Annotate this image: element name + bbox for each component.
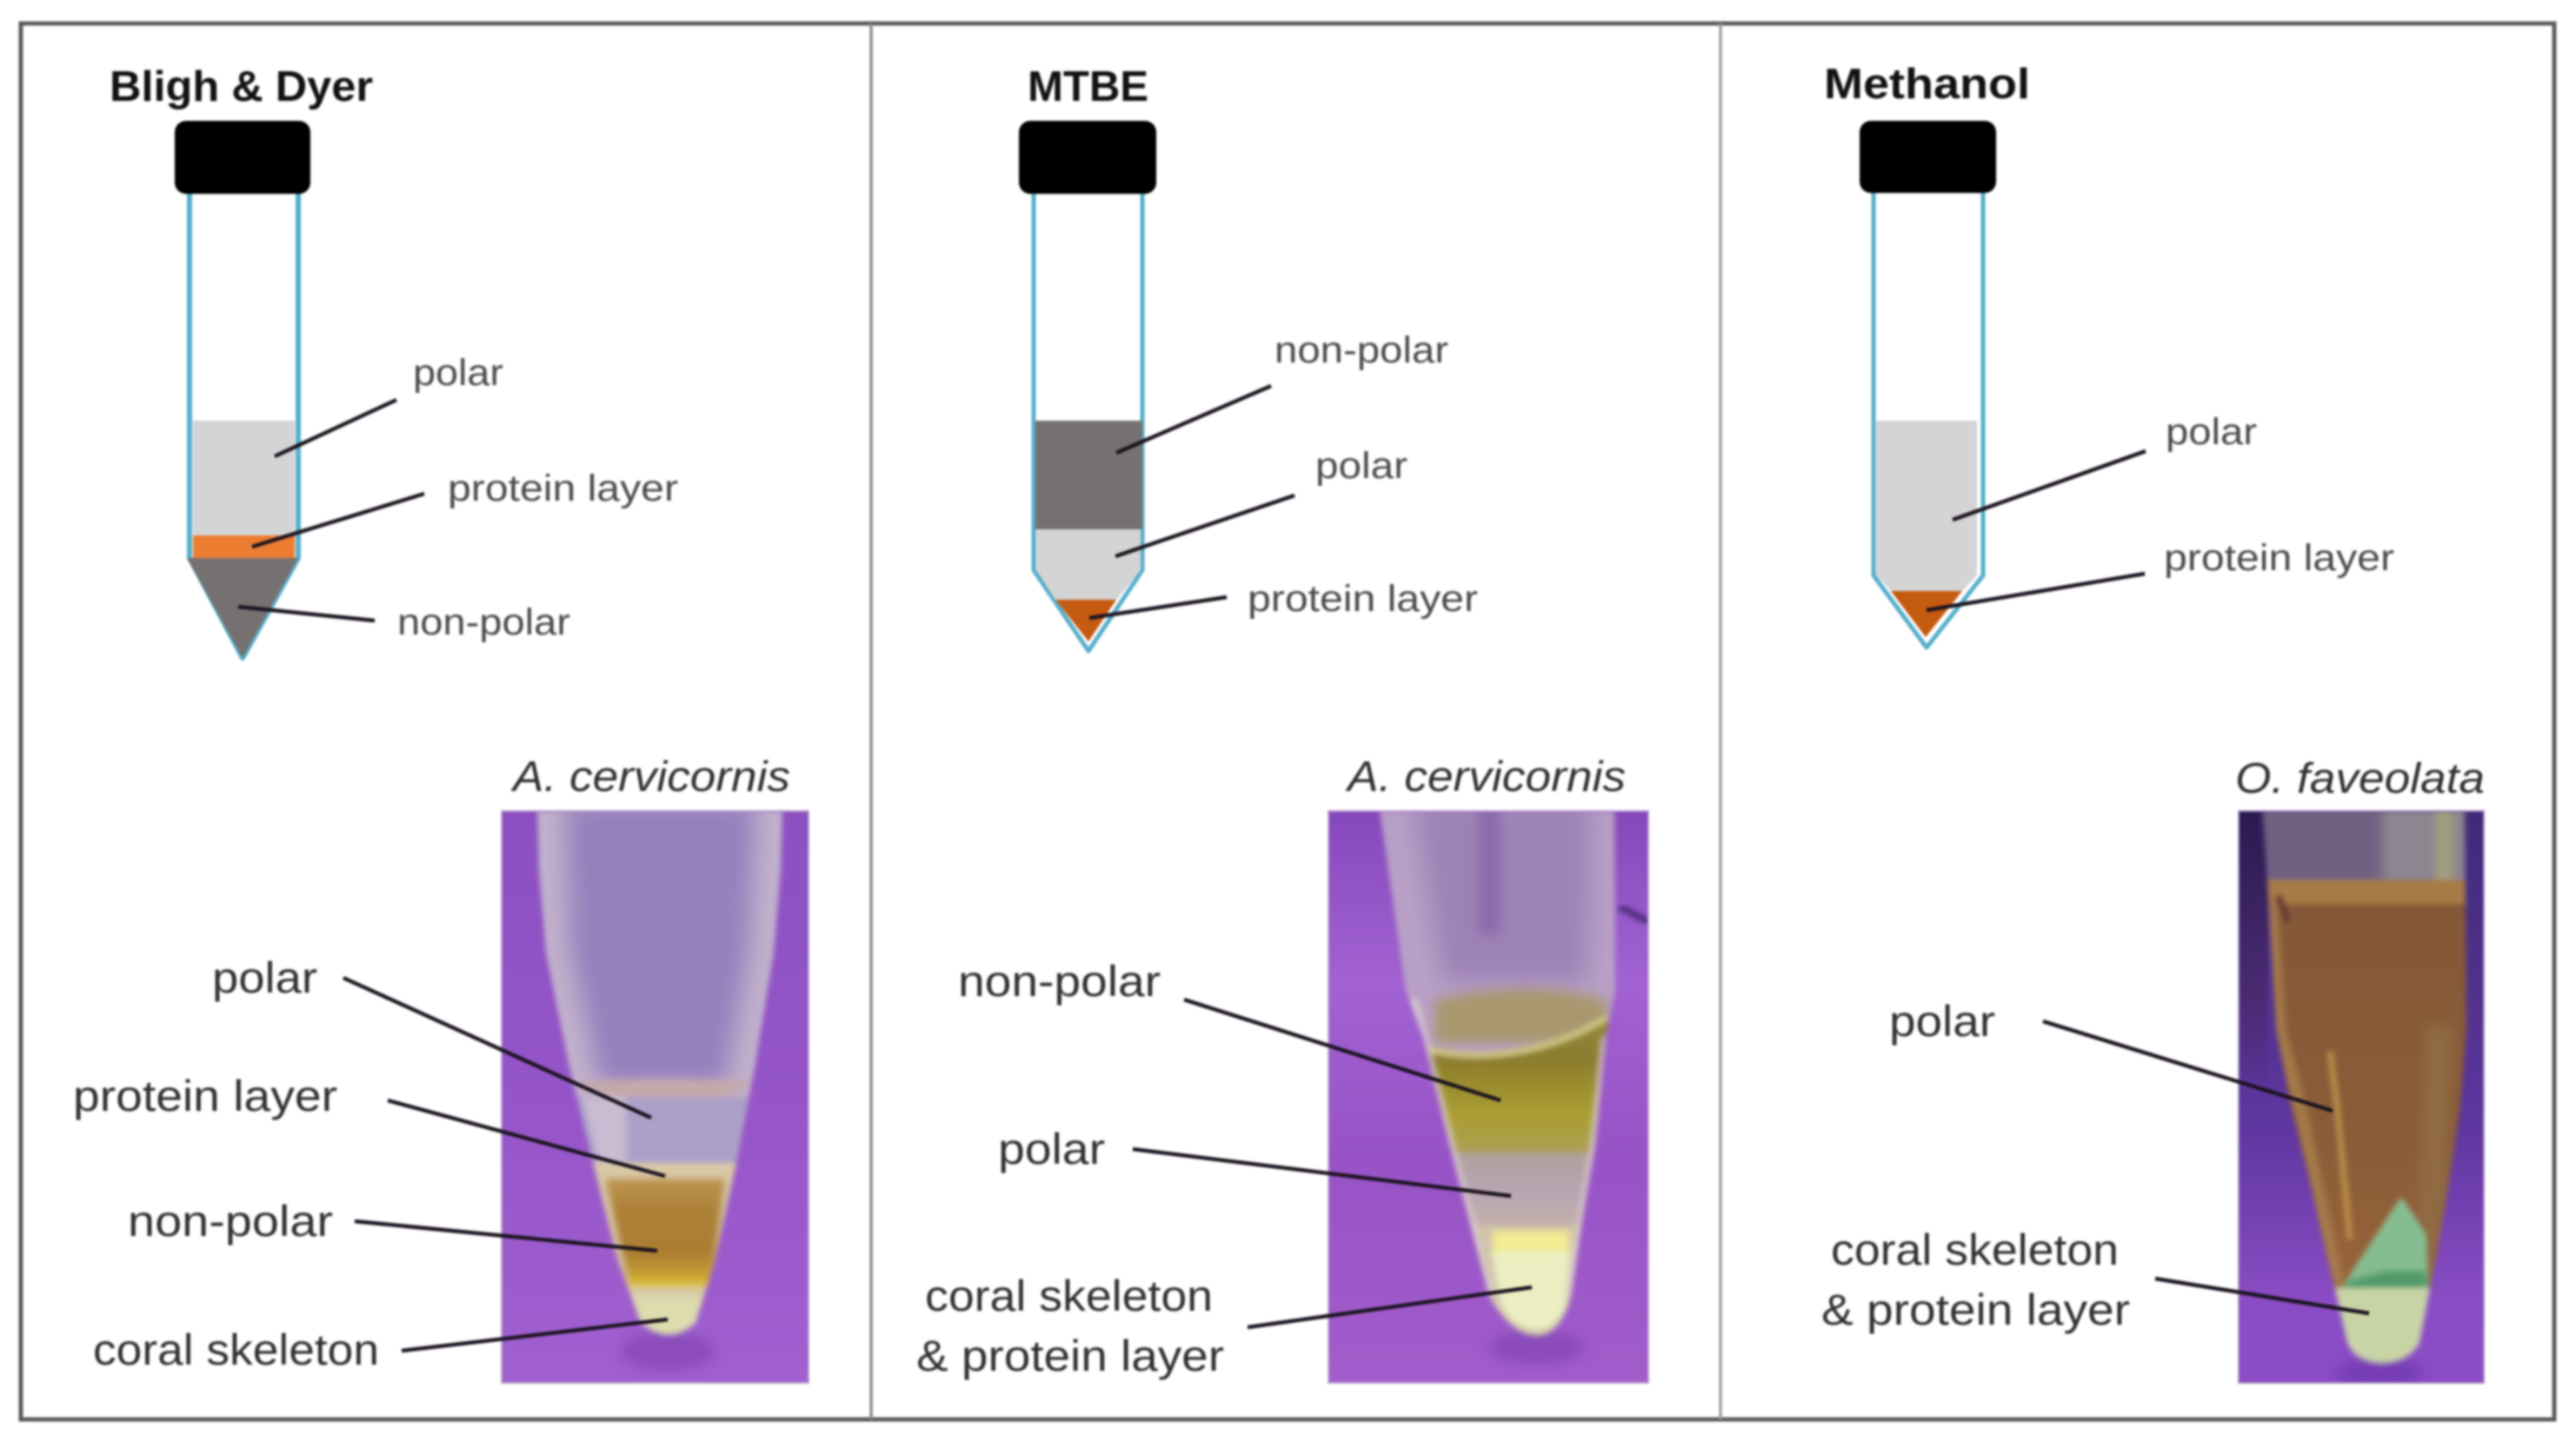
- panel: Bligh & Dyer: [73, 63, 809, 1384]
- photo label: coral skeleton: coral skeleton: [93, 1326, 379, 1374]
- photo label: coral skeleton and protein layer: coral skeleton: [925, 1272, 1213, 1320]
- tube diagram: Bligh & Dyer: [175, 121, 310, 658]
- label: non-polar: [238, 601, 570, 643]
- panel: Methanol: [1821, 61, 2485, 1389]
- heading: Bligh & Dyer: Bligh & Dyer: [110, 63, 373, 110]
- label: non-polar: non-polar: [1275, 329, 1448, 371]
- label: protein layer: [1089, 578, 1478, 620]
- label: polar: polar: [413, 352, 503, 394]
- photo label: non-polar: non-polar: [958, 957, 1161, 1006]
- species caption: O. faveolata: O. faveolata: [2235, 755, 2485, 802]
- panel: MTBE: [916, 63, 1649, 1384]
- photo label: coral skeleton and protein layer: & protein layer: [916, 1332, 1224, 1380]
- photo label: non-polar: [128, 1197, 657, 1251]
- heading: Methanol: Methanol: [1824, 61, 2030, 108]
- photo: A. cervicornis tube: [1328, 800, 1649, 1384]
- photo label: coral skeleton: [93, 1319, 668, 1374]
- photo label: polar: polar: [998, 1125, 1105, 1173]
- species caption: A. cervicornis: A. cervicornis: [510, 754, 790, 801]
- label: protein layer: [1927, 537, 2394, 610]
- label: polar: polar: [1315, 445, 1408, 487]
- label: polar: polar: [2166, 411, 2257, 453]
- label: protein layer: protein layer: [2164, 537, 2394, 579]
- heading: MTBE: MTBE: [1028, 63, 1148, 110]
- photo label: coral skeleton and protein layer: coral skeleton: [1831, 1226, 2119, 1274]
- tube diagram: Methanol: [1860, 121, 1996, 648]
- photo label: protein layer: protein layer: [73, 1072, 337, 1120]
- label: polar: [1953, 411, 2257, 520]
- photo: A. cervicornis tube: [501, 800, 809, 1384]
- label: non-polar: [1116, 329, 1448, 453]
- tube diagram: MTBE: [1019, 121, 1156, 651]
- photo label: coral skeleton and protein layer: & protein layer: [1821, 1286, 2130, 1334]
- label: protein layer: protein layer: [448, 468, 678, 509]
- label: polar: [1115, 445, 1408, 556]
- label: protein layer: [252, 468, 678, 547]
- photo: O. faveolata tube: [2238, 804, 2485, 1389]
- photo label: polar: [212, 954, 651, 1118]
- species caption: A. cervicornis: A. cervicornis: [1345, 754, 1626, 801]
- photo label: coral skeleton and protein layer: [916, 1272, 1532, 1380]
- label: protein layer: protein layer: [1248, 578, 1478, 620]
- photo label: non-polar: [958, 957, 1501, 1100]
- photo label: protein layer: [73, 1072, 665, 1176]
- divider: panels 1 and 2: [869, 23, 873, 1419]
- photo label: polar: [1889, 997, 2333, 1111]
- photo label: polar: polar: [1889, 997, 1995, 1046]
- divider: panels 2 and 3: [1719, 23, 1722, 1419]
- label: non-polar: non-polar: [397, 601, 570, 643]
- photo label: polar: [998, 1125, 1511, 1196]
- photo label: polar: polar: [212, 954, 317, 1002]
- photo label: coral skeleton and protein layer: [1821, 1226, 2369, 1334]
- label: polar: [275, 352, 503, 456]
- photo label: non-polar: non-polar: [128, 1197, 333, 1246]
